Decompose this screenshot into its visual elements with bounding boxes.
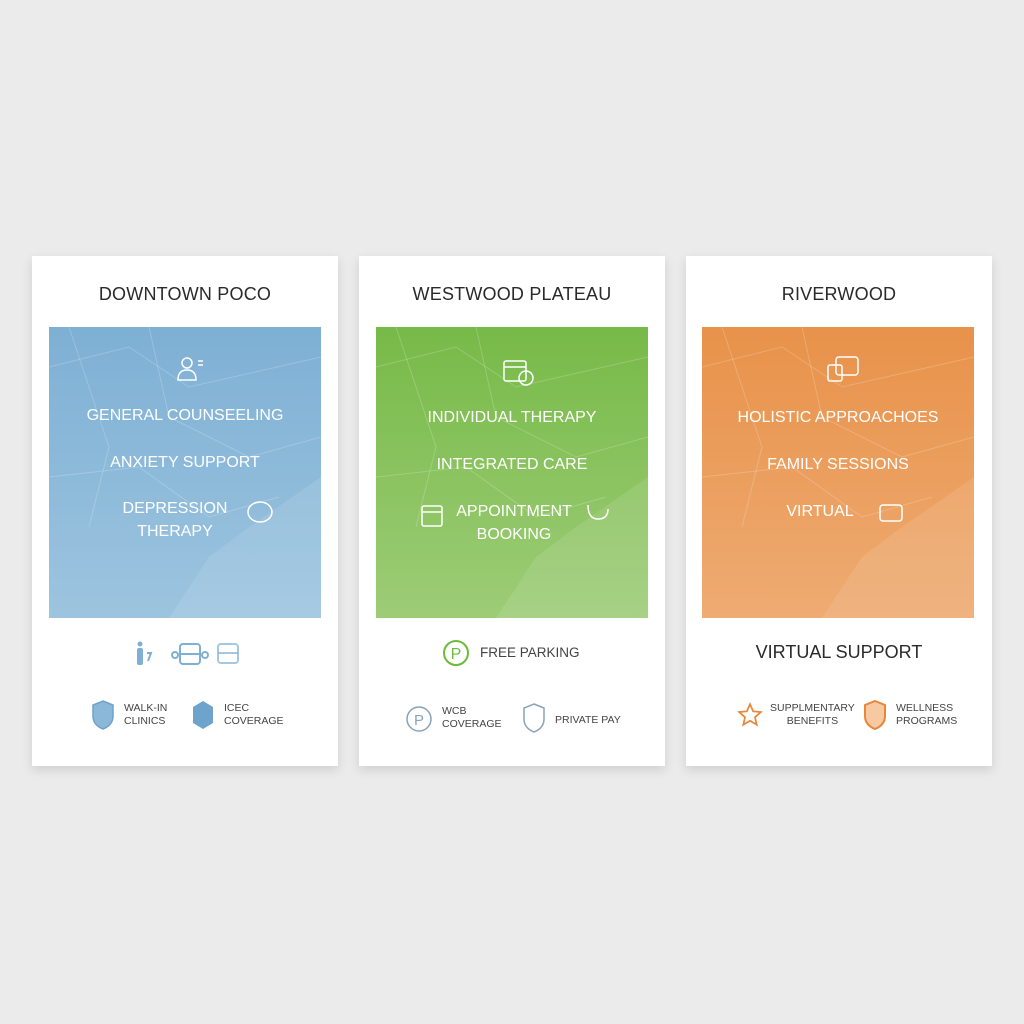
label <box>124 702 167 727</box>
label: WCB <box>442 705 466 717</box>
label: COVERAGE <box>442 718 502 730</box>
icon: shield walk-in <box>92 700 114 730</box>
label: SUPPLMENTARY <box>770 702 855 714</box>
icon: parking grey <box>406 706 432 732</box>
map panel <box>702 327 974 618</box>
map panel: VIRTUAL <box>786 503 854 520</box>
map panel: HOLISTIC APPROACHOES <box>738 409 938 426</box>
map panel: INTEGRATED CARE <box>437 456 587 473</box>
map panel: FAMILY SESSIONS <box>767 456 909 473</box>
map panel: GENERAL COUNSEELING <box>87 407 283 424</box>
card: riverwood <box>686 256 992 766</box>
icon: parking <box>443 640 469 666</box>
label: CLINICS <box>124 715 165 727</box>
icon: parking grey: P <box>414 712 424 729</box>
label: ICEC <box>224 702 249 714</box>
card: downtown poco <box>32 256 338 766</box>
map panel: BOOKING <box>477 526 551 543</box>
map panel: DEPRESSION <box>123 500 227 517</box>
label: PROGRAMS <box>896 715 957 727</box>
map panel: THERAPY <box>137 523 213 540</box>
icon: brain <box>247 501 273 523</box>
map panel: APPOINTMENT <box>456 503 572 520</box>
map panel <box>49 327 321 618</box>
icon: shield <box>523 703 545 733</box>
label: WELLNESS <box>896 702 953 714</box>
subheading: VIRTUAL SUPPORT <box>756 642 922 662</box>
icon: chat <box>827 356 859 382</box>
label <box>896 702 957 727</box>
label: WALK-IN <box>124 702 167 714</box>
label: PRIVATE PAY <box>555 714 621 726</box>
map panel: ANXIETY SUPPORT <box>110 454 260 471</box>
heading: DOWNTOWN POCO <box>99 284 271 304</box>
icon: chat small <box>879 504 903 522</box>
icon: calendar small <box>421 505 443 527</box>
icon: counselor <box>177 357 203 381</box>
label <box>224 702 284 727</box>
label: COVERAGE <box>224 715 284 727</box>
label <box>442 705 502 730</box>
map panel <box>376 327 648 618</box>
label: BENEFITS <box>787 715 838 727</box>
label <box>770 702 855 727</box>
label: FREE PARKING <box>480 645 580 660</box>
icon: star <box>737 702 763 726</box>
map panel: INDIVIDUAL THERAPY <box>428 409 596 426</box>
card: westwood plateau <box>359 256 665 766</box>
heading: WESTWOOD PLATEAU <box>413 284 611 304</box>
icon: hexagon coverage <box>193 701 213 729</box>
icon: calendar <box>503 360 534 386</box>
icon: stethoscope <box>587 505 609 520</box>
icon: orange shield <box>864 700 886 730</box>
heading: RIVERWOOD <box>782 284 896 304</box>
icon: parking: P <box>451 646 461 663</box>
transit icons <box>137 642 239 665</box>
